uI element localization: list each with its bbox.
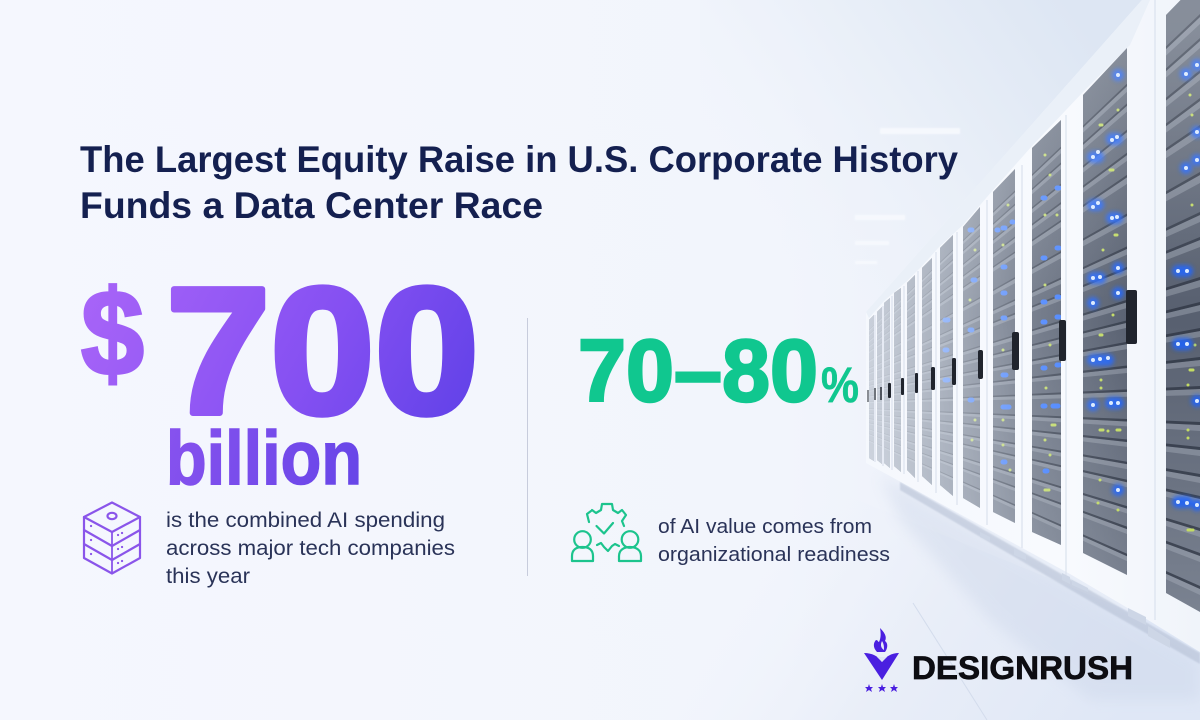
blue leds bbox=[1093, 65, 1197, 505]
logo mark bbox=[864, 628, 899, 692]
text: organizational readiness description: organizational readiness bbox=[658, 544, 890, 566]
text: organizational readiness description bbox=[658, 516, 890, 566]
cabinet divider lines bbox=[875, 0, 1155, 620]
title bbox=[80, 139, 958, 226]
text: organizational readiness description: of AI value comes from bbox=[658, 516, 872, 538]
logo wordmark: DESIGNRUSH bbox=[912, 650, 1133, 686]
rack cabinets body bbox=[866, 0, 1200, 652]
icon: team and gear bbox=[572, 504, 641, 561]
title: Funds a Data Center Race bbox=[80, 185, 543, 226]
text: AI spending description: across major tech companies bbox=[166, 537, 455, 560]
stat: 70-80%: 70–80 bbox=[578, 321, 818, 420]
divider bbox=[527, 318, 528, 576]
stat: 70-80%: % bbox=[821, 357, 859, 413]
glass server doors bbox=[869, 0, 1200, 612]
ceiling lights bbox=[855, 128, 960, 264]
text: AI spending description: this year bbox=[166, 565, 250, 588]
title: The Largest Equity Raise in U.S. Corporate History bbox=[80, 139, 958, 180]
text: AI spending description bbox=[166, 509, 455, 588]
700 figure: 700 bbox=[166, 251, 479, 452]
cabinet top frame shading bbox=[866, 0, 1150, 318]
glass wash toward far end bbox=[869, 79, 1115, 562]
rack shadow line on floor bbox=[900, 482, 1200, 664]
cabinet feet bbox=[980, 532, 1170, 648]
icon: server stack bbox=[84, 502, 140, 574]
stat: $700 billion bbox=[81, 251, 479, 501]
blue led glow bbox=[1093, 65, 1197, 505]
floor reflection under racks bbox=[880, 475, 1200, 700]
floor seam bbox=[913, 603, 987, 720]
server unit face highlights bbox=[877, 18, 1200, 595]
photo: server racks in a data center aisle bbox=[867, 0, 1200, 692]
dollar sign: $ bbox=[81, 265, 144, 401]
billion label: billion bbox=[166, 416, 362, 501]
server unit gaps bbox=[869, 14, 1200, 589]
green status leds bbox=[970, 95, 1195, 530]
logo: DesignRush bbox=[864, 628, 1133, 692]
far blue leds bbox=[945, 188, 1059, 471]
text: AI spending description: is the combined AI spending bbox=[166, 509, 445, 532]
door handles bbox=[867, 290, 1137, 402]
